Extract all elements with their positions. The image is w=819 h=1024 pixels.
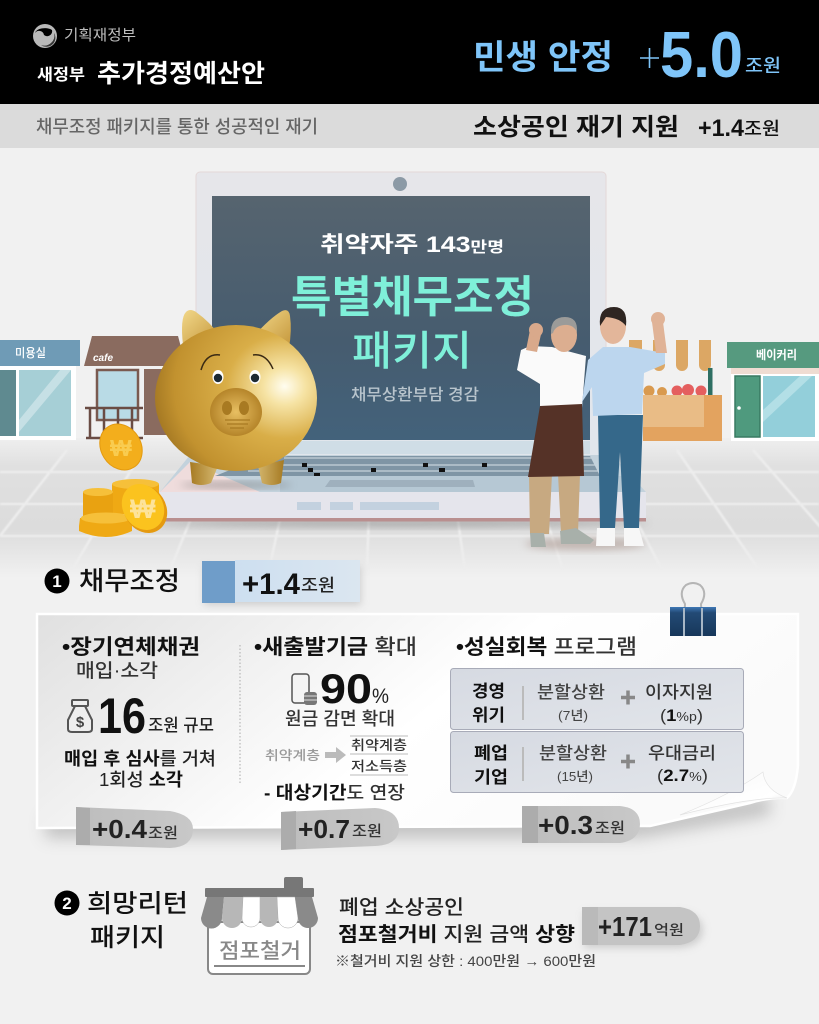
laptop (150, 172, 650, 527)
table row: business crisis: 분할상환 (537, 683, 605, 702)
table row: closed business: 기업 (474, 768, 508, 787)
description line 2: 점포철거비 지원 금액 상향 (338, 923, 575, 946)
footnote: ※철거비 지원 상한 : 400만원 → 600만원 (335, 953, 596, 969)
camera (393, 177, 407, 191)
column heading: •장기연체채권 (62, 636, 200, 659)
icon: ministry emblem (33, 24, 57, 48)
band title: 소상공인 재기 지원 (473, 114, 679, 141)
table row: business crisis: 위기 (472, 706, 505, 725)
table row: closed business: 분할상환 (539, 744, 607, 763)
section 1 heading (44, 560, 361, 605)
table row: closed business: 우대금리 (648, 744, 716, 763)
shop: beauty salon: 미용실 (15, 346, 46, 360)
table row: business crisis: 이자지원 (645, 683, 713, 702)
table row: closed business: (2.7%) (657, 766, 708, 785)
ministry name: 기획재정부 (64, 27, 136, 44)
amount pill: +0.7: +0.7 (298, 814, 350, 844)
section title line 1: 희망리턴 (87, 890, 188, 918)
section 2: hope return package (54, 877, 703, 974)
screen subtitle: 패키지 (352, 328, 472, 374)
amount tag: +1.4 (242, 568, 300, 601)
table row: business crisis: (7년) (558, 708, 588, 723)
shop: market stall (629, 340, 722, 441)
icon: money bag (68, 700, 92, 732)
after labels: 취약계층 (351, 738, 407, 753)
people: shop owners (517, 307, 667, 550)
icon: gold coins (79, 416, 176, 541)
vents (297, 502, 439, 510)
table row: closed business (450, 732, 744, 792)
floor tiles (0, 438, 819, 578)
unit: scale: 조원 규모 (148, 716, 214, 735)
headline: livelihood stability: 민생 안정 (473, 39, 613, 77)
keyboard (215, 456, 600, 476)
percent sign: % (372, 685, 389, 708)
shop: cafe: cafe (93, 353, 113, 364)
laptop screen (212, 196, 590, 440)
plus sign (640, 48, 659, 68)
figure: 5.0 trillion won: 5.0 (660, 18, 743, 91)
table row: business crisis: (1%p) (660, 706, 703, 725)
figure: 90%: 90 (320, 665, 372, 712)
amount pill: +0.4 (76, 807, 193, 848)
amount pill: +0.7: 조원 (352, 823, 382, 840)
amount pill: +171: 억원 (654, 922, 684, 938)
amount pill: +0.3 (522, 806, 640, 843)
table row: closed business: 폐업 (474, 744, 508, 763)
person: older owner (517, 317, 594, 547)
amount tag: 조원 (301, 576, 335, 595)
section title line 2: 패키지 (90, 924, 165, 952)
amount pill: +0.3: +0.3 (538, 810, 593, 840)
column: faithful recovery program (450, 636, 744, 792)
figure: 16 trillion: 16 (98, 688, 146, 744)
description line 1: 폐업 소상공인 (339, 896, 464, 919)
person: younger owner (582, 307, 667, 546)
shop: cafe (84, 336, 186, 438)
table row: business crisis: 경영 (472, 682, 505, 701)
after labels: 저소득층 (351, 759, 407, 774)
sub header band (0, 104, 819, 148)
header bar (0, 0, 819, 104)
paper curl (680, 772, 787, 815)
amount pill: +0.3: 조원 (595, 820, 625, 837)
amount tag (202, 560, 361, 605)
after labels (350, 736, 408, 775)
column: long-term overdue debt (62, 636, 216, 790)
amount pill: +0.4: +0.4 (92, 814, 148, 844)
shop: beauty salon (0, 340, 80, 440)
screen caption: 채무상환부담 경감 (351, 386, 479, 404)
number badge 2: 2 (62, 894, 72, 913)
icon: gold piggy bank (155, 310, 317, 488)
description line 2: 1회성 소각 (99, 770, 183, 790)
band subtitle: 채무조정 패키지를 통한 성공적인 재기 (36, 117, 318, 137)
panel: paper note (37, 614, 798, 850)
icon: gold coins: ₩ (130, 494, 156, 524)
icon: gold coins: ₩ (110, 435, 132, 461)
shop: bakery: 베이커리 (756, 348, 797, 362)
shop: bakery (727, 342, 819, 441)
heading: supplementary budget: 추가경정예산안 (97, 60, 265, 88)
divider (239, 645, 241, 783)
icon: store closing (201, 877, 318, 974)
amount pill: +171: +171 (598, 911, 652, 942)
column heading: •새출발기금 확대 (254, 636, 417, 659)
icon: store closing: 점포철거 (219, 940, 301, 963)
before label: 취약계층 (265, 748, 320, 763)
unit: 조원 (745, 56, 781, 76)
number badge 2 (54, 890, 80, 916)
band unit: 조원 (744, 119, 780, 139)
icon: binder clip (670, 583, 716, 636)
period extension: - 대상기간 도 연장 (264, 783, 405, 803)
column subheading: 매입·소각 (76, 660, 158, 682)
screen title: 특별채무조정 (291, 273, 534, 322)
arrow (325, 747, 346, 763)
laptop lid (196, 172, 606, 457)
principal reduction: 원금 감면 확대 (285, 709, 395, 729)
number badge 1: 1 (52, 572, 62, 591)
table row: closed business: (15년) (557, 769, 593, 784)
table row: business crisis (450, 668, 744, 730)
icon: money bag: $ (76, 714, 85, 731)
heading: new government: 새정부 (37, 66, 85, 84)
amount pill: +0.7 (281, 808, 399, 850)
number badge 1 (44, 568, 70, 594)
laptop base (160, 455, 646, 518)
section title: debt adjustment: 채무조정 (79, 566, 180, 596)
amount pill: +0.4: 조원 (148, 825, 178, 842)
screen text: vulnerable owners: 취약자주 143 만명 (320, 232, 504, 257)
icon: phone and coins (292, 674, 317, 705)
band figure: +1.4 (698, 115, 745, 142)
column: new start fund (254, 636, 417, 803)
amount pill: +171 (582, 907, 703, 948)
description line 1: 매입 후 심사를 거쳐 (64, 749, 216, 769)
column heading: •성실회복 프로그램 (456, 636, 637, 659)
